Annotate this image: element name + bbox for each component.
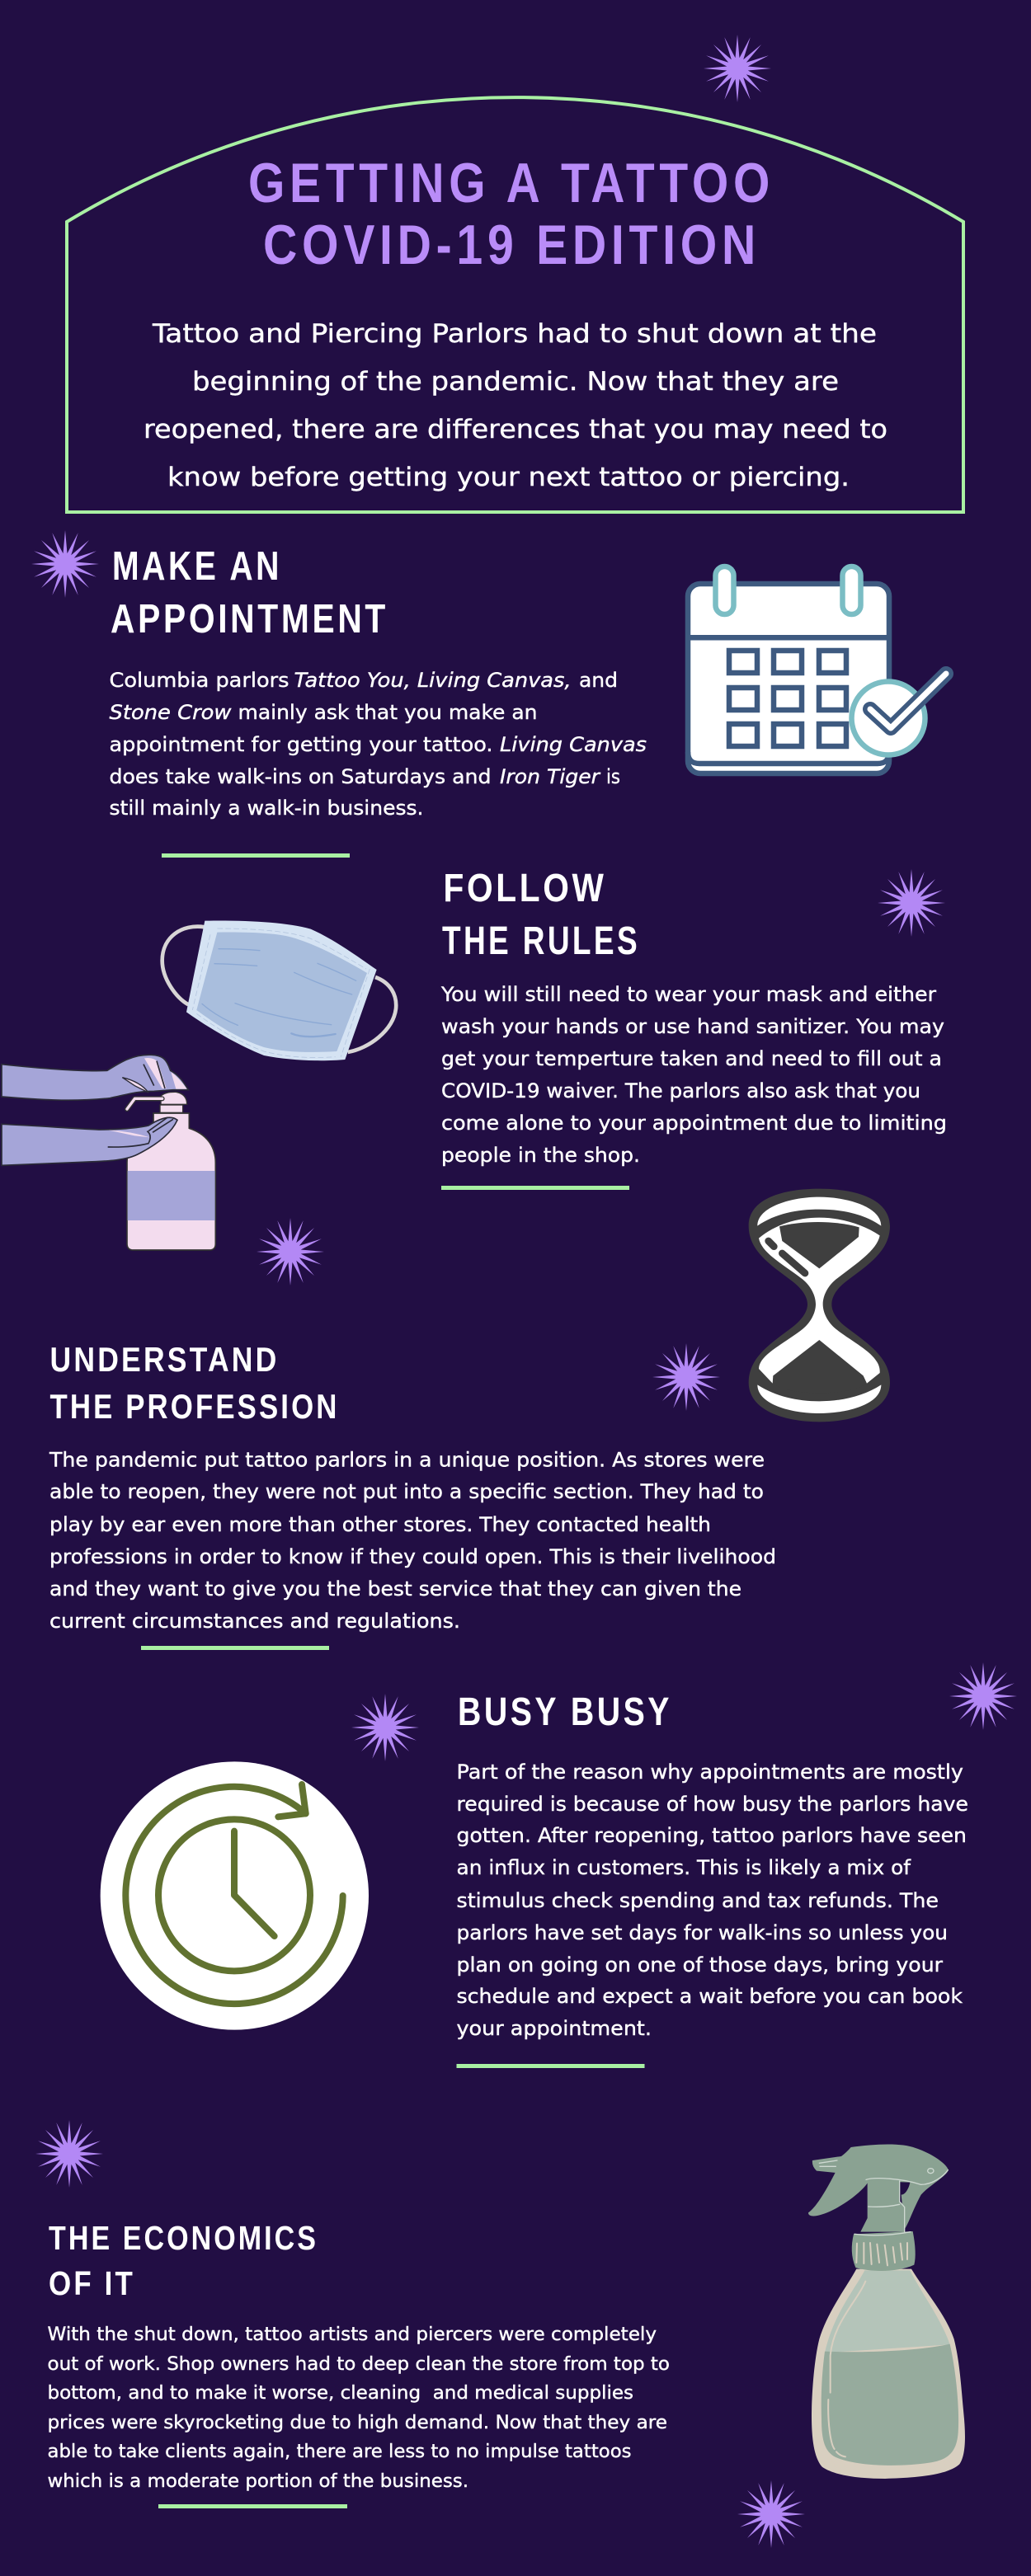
intro text: beginning of the pandemic. Now that they are <box>192 367 839 397</box>
body text: busy busy: required is because of how busy the parlors have <box>457 1793 968 1816</box>
body text: make an appointment: mainly ask that you make an <box>238 701 538 724</box>
body text: follow the rules: people in the shop. <box>441 1144 640 1167</box>
icon: star burst sanitizer <box>257 1218 324 1286</box>
body text: make an appointment: Living Canvas <box>500 733 647 756</box>
body text: the economics of it: which is a moderate portion of the business. <box>48 2470 468 2492</box>
body text: the economics of it: bottom, and to make it worse, cleaning and medical supplies <box>48 2382 633 2404</box>
icon: hands on sanitizer bottle <box>2 1055 215 1250</box>
icon: star burst appointment <box>31 530 99 598</box>
body text: make an appointment: and <box>579 669 618 692</box>
icon: face mask <box>162 921 396 1060</box>
body text: make an appointment: still mainly a walk-in business. <box>109 797 424 820</box>
arch outline <box>67 97 963 512</box>
body text: busy busy: your appointment. <box>457 2017 652 2040</box>
heading: busy busy: BUSY BUSY <box>458 1690 672 1734</box>
heading: make an appointment <box>111 544 388 642</box>
body text: the economics of it: able to take clients again, there are less to no impulse tattoos <box>48 2441 632 2462</box>
body text: busy busy: schedule and expect a wait before you can book <box>457 1985 963 2008</box>
body text: follow the rules: wash your hands or use hand sanitizer. You may <box>441 1015 944 1038</box>
panel: understand the profession <box>49 1189 890 1650</box>
body text: understand the profession: play by ear even more than other stores. They contacted health <box>49 1513 711 1536</box>
body text: make an appointment: appointment for getting your tattoo. <box>109 733 493 756</box>
heading: understand the profession: UNDERSTAND <box>49 1340 279 1379</box>
heading: the economics of it <box>49 2219 318 2302</box>
body text: follow the rules: You will still need to wear your mask and either <box>440 983 936 1006</box>
body text: busy busy: an influx in customers. This is likely a mix of <box>457 1856 911 1879</box>
icon: star burst top <box>704 35 771 102</box>
intro text: know before getting your next tattoo or piercing. <box>167 463 850 492</box>
body text: understand the profession: The pandemic put tattoo parlors in a unique position. As stores were <box>49 1448 765 1471</box>
heading: make an appointment: MAKE AN <box>112 544 282 589</box>
heading: the economics of it: THE ECONOMICS <box>49 2219 318 2257</box>
body text: make an appointment: Columbia parlors <box>109 669 289 692</box>
body text: make an appointment: Stone Crow <box>109 701 232 724</box>
heading: follow the rules: THE RULES <box>442 919 640 963</box>
heading: follow the rules: FOLLOW <box>444 867 607 910</box>
intro text: Tattoo and Piercing Parlors had to shut down at the <box>152 319 877 349</box>
icon: spray bottle <box>808 2144 965 2479</box>
icon: calendar with check mark <box>688 566 946 773</box>
panel: busy busy <box>101 1662 1017 2068</box>
body text: understand the profession: able to reopen, they were not put into a specific section. They had to <box>49 1480 764 1503</box>
body text: the economics of it <box>48 2324 670 2492</box>
body text: the economics of it: prices were skyrocketing due to high demand. Now that they are <box>48 2412 667 2433</box>
body text: follow the rules: come alone to your appointment due to limiting <box>441 1112 947 1135</box>
body text: busy busy: parlors have set days for walk-ins so unless you <box>457 1921 948 1944</box>
body text: make an appointment: does take walk-ins on Saturdays and <box>109 765 492 788</box>
body text: understand the profession: current circumstances and regulations. <box>49 1610 460 1633</box>
intro text: reopened, there are differences that you may need to <box>144 415 887 444</box>
body text: the economics of it: With the shut down, tattoo artists and piercers were completely <box>48 2324 657 2345</box>
body text: follow the rules: COVID-19 waiver. The parlors also ask that you <box>441 1079 920 1102</box>
heading: make an appointment: APPOINTMENT <box>111 597 388 642</box>
body text: understand the profession: professions in order to know if they could open. This is their livelihood <box>49 1545 776 1568</box>
panel: make an appointment <box>109 544 946 858</box>
heading: understand the profession <box>49 1340 340 1426</box>
body text: busy busy: Part of the reason why appointments are mostly <box>457 1760 963 1784</box>
body text: busy busy <box>457 1760 968 2040</box>
body text: the economics of it: out of work. Shop owners had to deep clean the store from top to <box>48 2353 670 2375</box>
body text: make an appointment <box>109 669 647 820</box>
icon: clock with circular arrow <box>101 1761 369 2030</box>
body text: understand the profession: and they want to give you the best service that they can given the <box>49 1577 741 1601</box>
icon: star burst economics <box>35 2120 103 2188</box>
icon: star burst follow <box>878 869 945 937</box>
panel: the economics of it <box>35 2120 965 2548</box>
body text: busy busy: stimulus check spending and tax refunds. The <box>457 1889 939 1912</box>
title: GETTING A TATTOO <box>248 152 774 214</box>
body text: make an appointment: Iron Tiger <box>500 765 601 788</box>
icon: hourglass <box>749 1189 890 1422</box>
body text: make an appointment: Tattoo You, Living Canvas, <box>294 669 571 692</box>
body text: follow the rules: get your temperture taken and need to fill out a <box>441 1047 942 1070</box>
body text: follow the rules <box>440 983 947 1167</box>
icon: star burst spray bottle <box>737 2480 805 2548</box>
panel: follow the rules <box>2 867 947 1286</box>
icon: star burst profession <box>652 1343 720 1411</box>
body text: busy busy: gotten. After reopening, tattoo parlors have seen <box>457 1824 967 1847</box>
title: COVID-19 EDITION <box>263 214 760 276</box>
icon: star burst busy left <box>351 1694 419 1761</box>
heading: understand the profession: THE PROFESSION <box>49 1387 340 1426</box>
intro text <box>144 319 887 492</box>
body text: busy busy: plan on going on one of those days, bring your <box>457 1953 943 1977</box>
heading: follow the rules <box>442 867 640 963</box>
title <box>248 152 774 276</box>
icon: star burst busy right <box>949 1662 1017 1730</box>
panel: header arch <box>67 97 963 512</box>
heading: the economics of it: OF IT <box>49 2264 135 2302</box>
body text: make an appointment: is <box>606 765 620 788</box>
body text: understand the profession <box>49 1448 776 1633</box>
